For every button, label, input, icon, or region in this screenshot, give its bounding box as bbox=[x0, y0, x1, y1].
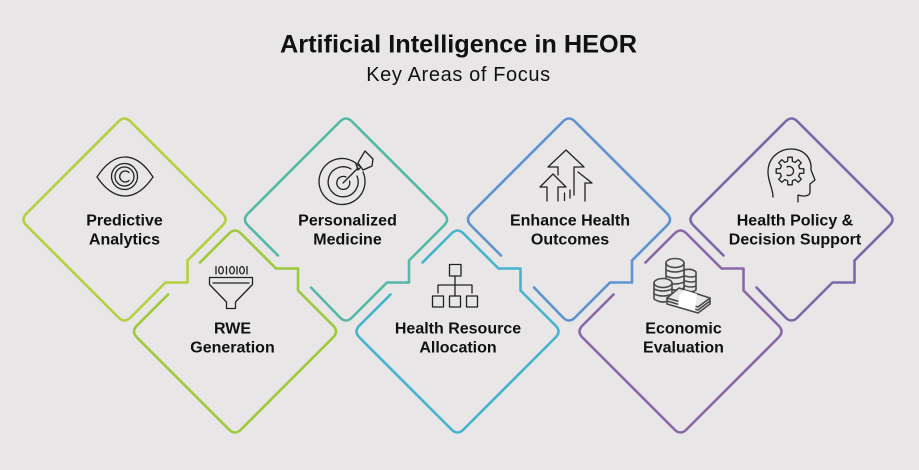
panel: health policy and decision support bbox=[690, 118, 892, 320]
icon: coins and cash bbox=[654, 258, 710, 313]
icon: target with arrow bbox=[319, 151, 373, 204]
diamond outline: economic evaluation bbox=[580, 230, 782, 432]
icon: eye bbox=[97, 157, 153, 196]
panel: RWE generation bbox=[134, 230, 336, 432]
label: Health Resource bbox=[395, 320, 521, 338]
label: Personalized bbox=[298, 212, 397, 230]
panel: enhance health outcomes bbox=[468, 118, 670, 320]
label: Health Policy & bbox=[737, 212, 854, 230]
icon: data funnel bbox=[210, 266, 252, 308]
panel: health resource allocation bbox=[356, 230, 558, 432]
label: Predictive bbox=[86, 212, 163, 230]
panel: predictive analytics bbox=[24, 118, 226, 320]
panel: economic evaluation bbox=[580, 230, 782, 432]
label: Medicine bbox=[313, 232, 382, 248]
label: Analytics bbox=[89, 232, 160, 248]
diamond outline: predictive analytics bbox=[24, 118, 226, 320]
icon: rising arrows bbox=[540, 150, 592, 201]
diamond outline: health resource allocation bbox=[356, 230, 558, 432]
label: Outcomes bbox=[531, 232, 609, 248]
label: RWE bbox=[214, 320, 251, 338]
label: Generation bbox=[190, 340, 275, 356]
panel: personalized medicine bbox=[245, 118, 447, 320]
label: Decision Support bbox=[729, 232, 862, 248]
subtitle: Key Areas of Focus bbox=[366, 64, 551, 86]
label: Allocation bbox=[419, 340, 497, 356]
label: Enhance Health bbox=[510, 212, 630, 230]
label: Evaluation bbox=[643, 340, 724, 356]
icon: hierarchy bbox=[432, 264, 478, 307]
label: Economic bbox=[645, 320, 722, 338]
icon: head with gear bbox=[768, 149, 815, 202]
diamond outline: RWE generation bbox=[134, 230, 336, 432]
diamond outline: personalized medicine bbox=[245, 118, 447, 320]
title: Artificial Intelligence in HEOR bbox=[280, 30, 637, 58]
diamond outline: enhance health outcomes bbox=[468, 118, 670, 320]
diamond outline: health policy and decision support bbox=[690, 118, 892, 320]
